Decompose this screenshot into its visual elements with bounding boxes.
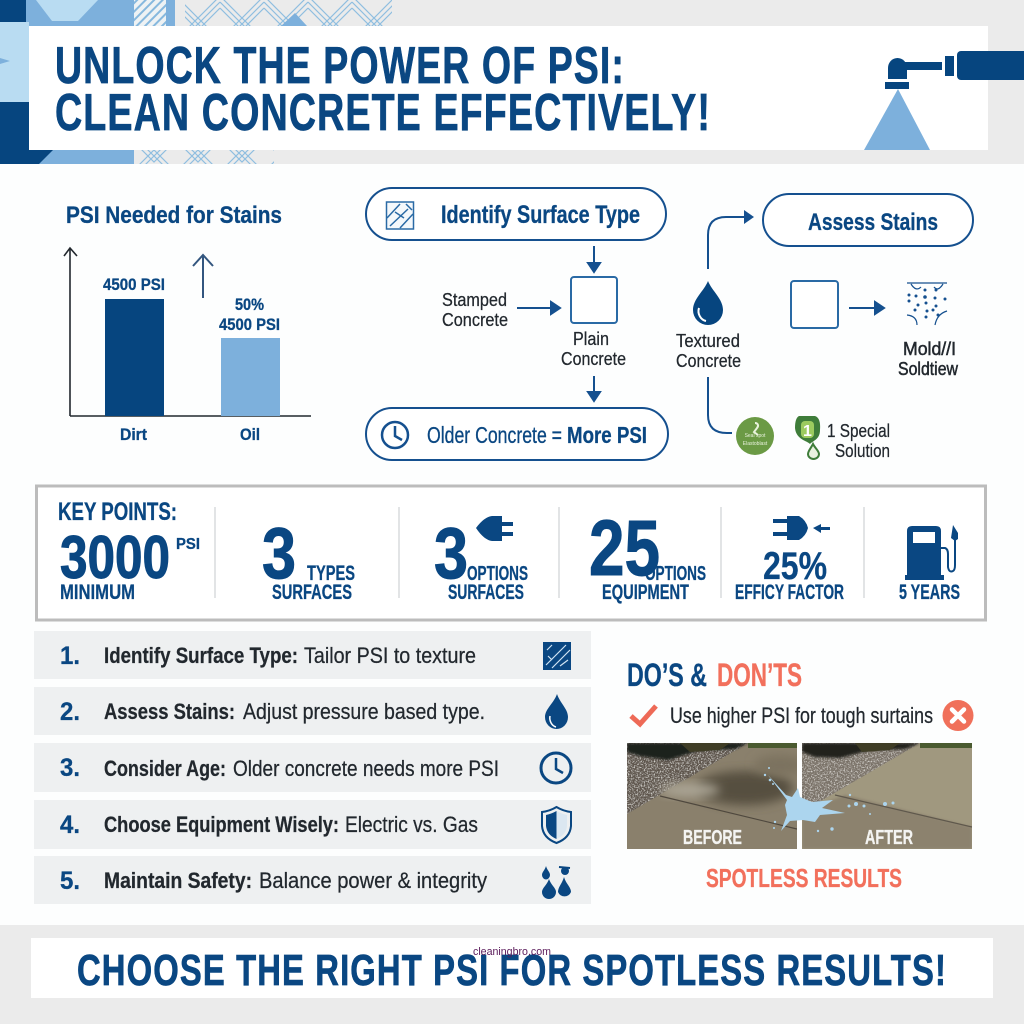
panel: key points (36, 486, 986, 620)
stat: 3 options surfaces (434, 514, 528, 604)
oil value: 4500 PSI (219, 315, 280, 334)
heading (627, 657, 802, 693)
photo: before (627, 743, 797, 849)
icon: surface texture (543, 642, 571, 670)
step 2: Adjust pressure based type. (243, 699, 485, 724)
stat: 3 types surfaces: TYPES (307, 562, 355, 585)
step 5: 5. (60, 867, 80, 895)
connector to special solution (708, 377, 732, 433)
icon: drops (542, 866, 571, 899)
title: CLEAN CONCRETE EFFECTIVELY! (55, 84, 711, 142)
square: stain (791, 281, 838, 328)
stat: 25% efficiency factor: 25% (763, 545, 827, 588)
label: textured concrete (676, 331, 741, 371)
icon: green badge (736, 417, 774, 455)
dirt value: 4500 PSI (103, 275, 165, 294)
icon: water drop (693, 281, 723, 325)
stat: 25 options equipment: 25 (589, 503, 660, 592)
step 3 (34, 743, 591, 792)
label: plain concrete: Plain (573, 329, 609, 349)
stat: 3000 PSI minimum: PSI (176, 536, 200, 553)
pill: identify surface type: Identify Surface Type (441, 201, 640, 229)
stat: 25% efficiency factor: EFFICY FACTOR (735, 581, 844, 604)
pill: assess stains (763, 194, 973, 246)
icon: green badge: Elastoblast (743, 441, 768, 447)
spotless results: SPOTLESS RESULTS (706, 863, 902, 893)
step 3: Older concrete needs more PSI (233, 756, 499, 781)
step 1: Identify Surface Type: (104, 643, 298, 668)
step 1: 1. (60, 642, 80, 670)
oil value: 50% (235, 295, 264, 314)
label: mold (898, 339, 959, 379)
heading: DO’S & (627, 657, 707, 693)
icon: fuel pump (905, 525, 958, 580)
label: mold: Mold//I (903, 339, 956, 359)
pill: older concrete (366, 408, 668, 460)
stat: 3 options surfaces: OPTIONS (467, 563, 528, 585)
chart axes (64, 248, 311, 416)
stat: 25 options equipment: EQUIPMENT (602, 581, 689, 604)
heading: DON’TS (717, 657, 802, 693)
icon: pressure washer nozzle (864, 51, 1024, 150)
icon: check (631, 706, 656, 724)
water splash (764, 767, 894, 832)
panel: surface flowchart (366, 188, 973, 461)
pill: assess stains: Assess Stains (808, 209, 938, 236)
arrow (588, 246, 600, 272)
pill: older concrete: Older Concrete = (427, 422, 562, 448)
arrow (849, 302, 884, 314)
stat: 5 years (899, 525, 960, 604)
icon: plug (476, 516, 513, 541)
step 2 (34, 687, 591, 735)
watermark: cleaningbro.com (473, 946, 551, 958)
icon: green badge: Seal spot (745, 433, 766, 439)
panel: PSI bar chart (64, 202, 311, 444)
photo: before: BEFORE (683, 827, 742, 849)
bar label: dirt: Dirt (120, 425, 147, 444)
label: textured concrete: Textured (676, 331, 740, 351)
photo: after (802, 743, 972, 849)
label: special solution: 1 Special (827, 421, 890, 441)
icon: drop (545, 694, 568, 729)
stat: 3000 PSI minimum: 3000 (60, 524, 170, 591)
oil value (219, 295, 280, 334)
stat: 3 types surfaces: 3 (262, 514, 296, 594)
label: mold: Soldtiew (898, 359, 959, 379)
title (55, 37, 711, 142)
icon: shield (542, 807, 571, 843)
step 1: Tailor PSI to texture (304, 643, 476, 668)
label: plain concrete (561, 329, 626, 369)
stat: 5 years: 5 YEARS (899, 581, 960, 604)
step 5: Maintain Safety: (104, 868, 252, 893)
step 4 (34, 800, 591, 849)
pill: identify surface type (366, 188, 666, 240)
label: special solution (827, 421, 890, 461)
bar: oil (221, 338, 280, 416)
header banner (0, 0, 1024, 166)
label: stamped concrete: Stamped (442, 290, 507, 310)
step 2: 2. (60, 698, 80, 726)
connector to assess stains (708, 217, 746, 269)
key points heading: KEY POINTS: (58, 498, 177, 526)
icon: mold spores (907, 283, 947, 325)
title: UNLOCK THE POWER OF PSI: (55, 37, 625, 95)
label: plain concrete: Concrete (561, 349, 626, 369)
arrowhead (744, 210, 754, 224)
chart heading: PSI Needed for Stains (66, 202, 282, 229)
stat: 3 options surfaces: 3 (434, 514, 468, 594)
step 5: Balance power & integrity (259, 868, 487, 893)
icon: plug and connector (773, 516, 830, 540)
icon: special solution drop (795, 416, 820, 459)
step 4: Electric vs. Gas (345, 812, 478, 837)
step 3: 3. (60, 754, 80, 782)
step 3: Consider Age: (104, 756, 226, 781)
stat: 25 options equipment: OPTIONS (645, 563, 706, 585)
stat: 3 options surfaces: SURFACES (448, 581, 524, 604)
footer banner (0, 925, 1024, 1024)
stat: 3000 PSI minimum: MINIMUM (60, 581, 135, 604)
arrow (517, 302, 560, 314)
bar label: oil: Oil (240, 425, 260, 444)
stat: 3 types surfaces: SURFACES (272, 581, 352, 604)
label: textured concrete: Concrete (676, 351, 741, 371)
photo: after: AFTER (865, 827, 913, 849)
panel: numbered steps (34, 631, 591, 904)
icon: cross (942, 700, 974, 731)
tip text: Use higher PSI for tough surtains (670, 703, 933, 728)
step 2: Assess Stains: (104, 699, 235, 724)
stat: 3 types surfaces (262, 514, 355, 604)
stat: 25% efficiency factor (735, 516, 844, 604)
step 4: Choose Equipment Wisely: (104, 812, 339, 837)
label: special solution: Solution (835, 441, 890, 461)
arrow (588, 376, 600, 401)
square: plain concrete (571, 277, 617, 323)
stat: 25 options equipment (589, 503, 706, 604)
icon: special solution drop: 1 (803, 423, 812, 440)
step 5 (34, 856, 591, 904)
bar: dirt (105, 299, 164, 416)
label: stamped concrete (442, 290, 508, 330)
icon: clock (541, 753, 571, 783)
label: stamped concrete: Concrete (442, 310, 508, 330)
panel: do's and don'ts (627, 657, 974, 893)
step 4: 4. (60, 811, 80, 839)
step 1 (34, 631, 591, 679)
up arrow (193, 255, 213, 298)
pill: older concrete: More PSI (567, 422, 647, 448)
